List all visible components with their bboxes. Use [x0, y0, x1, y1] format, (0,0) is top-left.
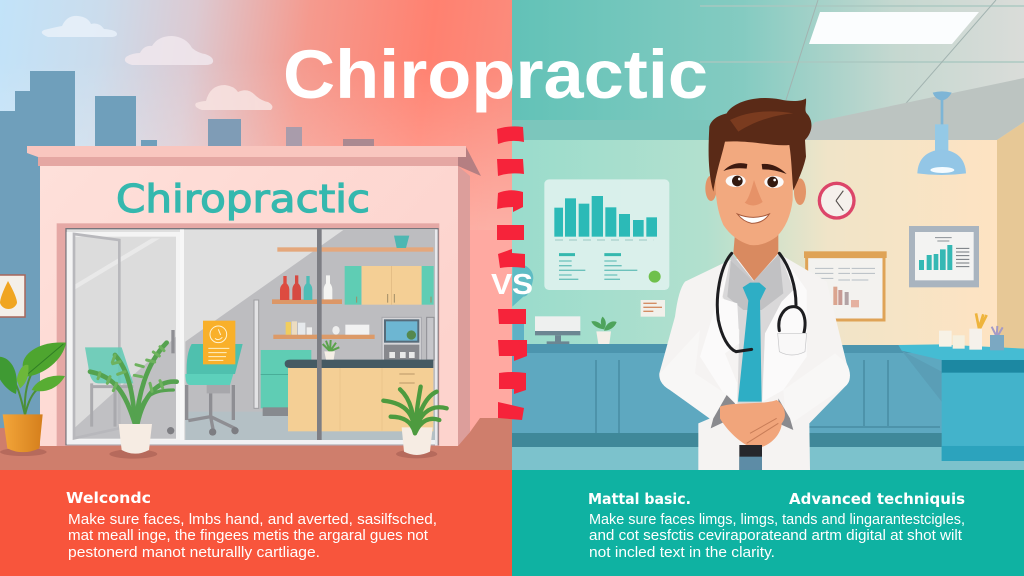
microwave and appliances	[382, 317, 434, 360]
shirt collar	[727, 253, 783, 310]
sticky note	[641, 300, 665, 317]
ears	[705, 176, 717, 201]
interior wall shadow	[185, 230, 435, 440]
ceiling shadow plane	[800, 78, 1024, 140]
right side wall	[997, 122, 1024, 350]
hair	[709, 98, 811, 192]
yellow poster	[203, 321, 235, 364]
panel: left scene background	[0, 0, 512, 470]
ceiling light panel	[809, 12, 979, 44]
building sign: Chiropractic	[116, 177, 370, 221]
chart legend	[555, 240, 653, 279]
notice board	[804, 251, 887, 320]
clouds	[42, 16, 272, 110]
clasped hands	[720, 400, 785, 448]
panel: right scene	[512, 0, 1024, 470]
necktie	[738, 283, 766, 402]
nose	[745, 180, 763, 206]
window sill	[67, 440, 437, 445]
vs label: VS	[491, 269, 533, 301]
left caption body: Make sure faces, lmbs hand, and averted, sasilfsched,	[68, 512, 437, 528]
right caption body: Make sure faces limgs, limgs, tands and lingarantestcigles,	[589, 512, 965, 528]
door pane	[67, 232, 180, 443]
face	[716, 140, 793, 245]
building front wall	[40, 164, 458, 446]
blue reception desk	[898, 344, 1024, 461]
storefront window, drawn in 3x local coordinates	[0, 223, 447, 459]
teal blob behind vs	[512, 264, 533, 307]
green badge	[649, 271, 661, 283]
wall chart board, drawn in 3x local coordinates	[512, 179, 679, 351]
arms	[660, 330, 730, 420]
ceiling tile lines	[700, 6, 1024, 62]
left caption body: mat meall inge, the fingees metis the argaral gues not	[68, 528, 428, 544]
coat pocket	[778, 333, 807, 355]
panel: right caption	[512, 470, 1024, 576]
ceiling	[512, 0, 1024, 140]
teal base cabinet	[261, 350, 311, 416]
main title: Chiropractic	[283, 36, 708, 113]
lapels	[700, 260, 739, 403]
desk items	[939, 313, 1004, 350]
door handle	[254, 300, 259, 408]
wall cabinets	[345, 266, 434, 305]
roof slab	[27, 146, 466, 157]
left caption body: pestonerd manot neturallly cartliage.	[68, 545, 320, 561]
roof underside	[38, 157, 462, 166]
right caption body: not incled text in the clarity.	[589, 545, 775, 561]
right caption body: and cot sesfctis ceviraporateand artm digital at shot wilt	[589, 528, 962, 544]
door-side broad-leaf plant	[0, 342, 66, 456]
roof edge	[458, 147, 481, 176]
red dashed ribbon divider	[497, 126, 527, 420]
pendant lamp	[917, 91, 966, 175]
exam chair	[167, 344, 243, 436]
right caption heading one: Mattal basic.	[588, 490, 691, 508]
neck	[733, 233, 778, 281]
right caption body	[589, 512, 965, 561]
panel: left caption	[0, 470, 512, 576]
shelves and bottles	[272, 236, 433, 339]
wall clock	[818, 182, 856, 220]
clinic building	[0, 146, 481, 459]
back wall	[512, 140, 998, 350]
floor: left	[0, 418, 512, 470]
right caption heading two: Advanced techniquis	[789, 490, 965, 508]
belt	[739, 445, 762, 470]
left chair	[85, 347, 133, 427]
eyebrows	[723, 163, 787, 174]
small counter plant	[323, 340, 339, 360]
monitor	[535, 316, 580, 345]
left caption heading: Welcondc	[66, 489, 151, 507]
left caption body	[68, 512, 437, 561]
doctor figure, drawn in 3x local coordinates	[659, 98, 850, 470]
centre sliding frame	[180, 229, 184, 444]
city skyline	[0, 71, 374, 470]
eyes	[726, 175, 784, 188]
window surround	[57, 223, 439, 446]
fern plant	[90, 343, 177, 459]
interior floor	[185, 412, 435, 440]
small desk plant	[591, 317, 617, 344]
framed chart	[909, 226, 979, 287]
lower cabinets and floor	[512, 345, 1024, 470]
white coat	[659, 253, 850, 470]
stethoscope	[717, 253, 805, 352]
central divider	[317, 229, 322, 445]
building side wall	[458, 166, 470, 446]
glass background	[67, 229, 437, 444]
reception counter	[285, 360, 433, 431]
smile	[737, 214, 769, 223]
wall details, drawn in 3x local coordinates	[804, 91, 1024, 461]
framed droplet picture	[0, 275, 25, 317]
right plant	[383, 387, 447, 458]
bar chart	[554, 196, 657, 237]
